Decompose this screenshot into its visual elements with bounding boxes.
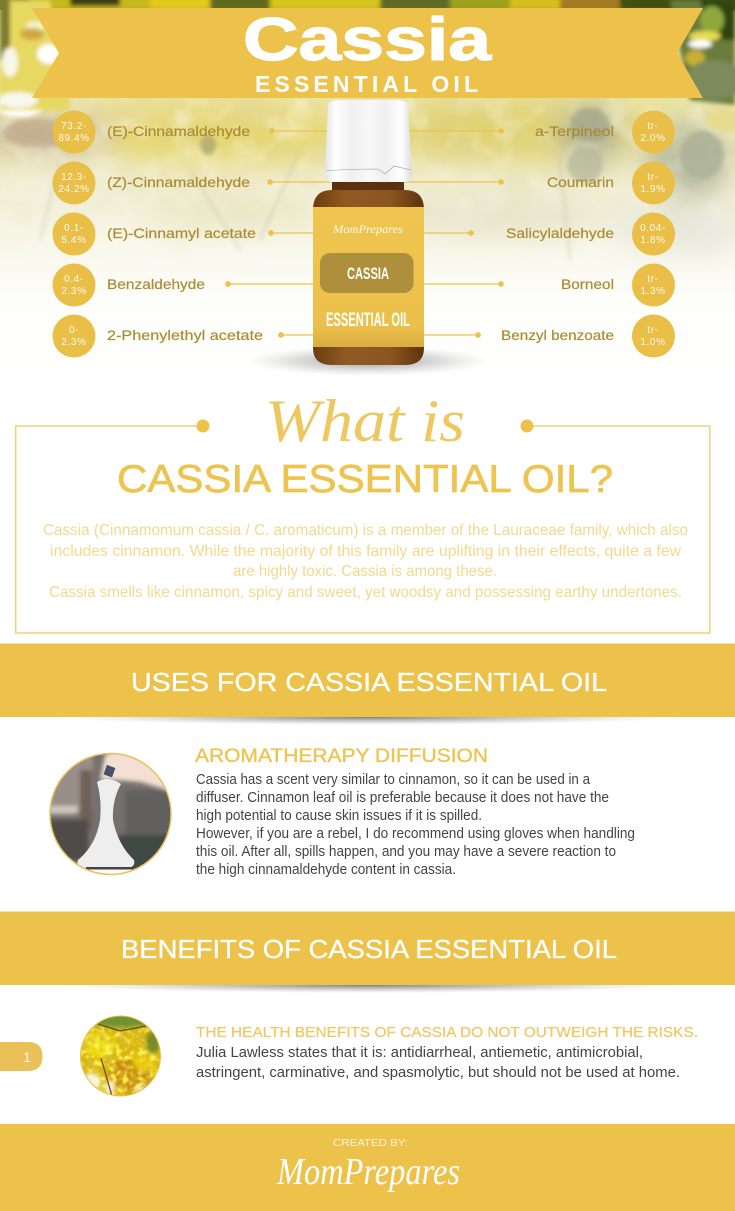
benefits text block <box>196 1044 680 1081</box>
section heading: benefits: BENEFITS OF CASSIA ESSENTIAL OIL <box>121 934 617 964</box>
heading: What is: What is <box>265 388 465 454</box>
bottle shadow <box>246 346 490 376</box>
decorative dot right <box>520 420 534 432</box>
description paragraph: includes cinnamon. While the majority of this family are uplifting in their effects, quite a few <box>50 543 681 560</box>
left compound labels: Benzaldehyde <box>107 276 205 292</box>
description paragraph: are highly toxic. Cassia is among these. <box>233 563 497 580</box>
left compound percentage badges <box>52 110 96 358</box>
heading: Cassia Essential Oil?: CASSIA ESSENTIAL OIL? <box>117 458 613 501</box>
left compound percentage badges: 73.2- <box>61 121 87 132</box>
subheading: health benefits: THE HEALTH BENEFITS OF CASSIA DO NOT OUTWEIGH THE RISKS. <box>196 1024 698 1041</box>
left compound labels <box>107 123 263 343</box>
left compound labels: (E)-Cinnamyl acetate <box>107 225 256 241</box>
benefits text block: Julia Lawless states that it is: antidiarrheal, antiemetic, antimicrobial, <box>196 1044 643 1061</box>
left compound labels: 2-Phenylethyl acetate <box>107 327 263 343</box>
aromatherapy text block: this oil. After all, spills happen, and you may have a severe reaction to <box>196 843 616 860</box>
right compound percentage badges: 1.0% <box>640 337 666 348</box>
left compound percentage badges: 89.4% <box>58 133 90 144</box>
right compound percentage badges: 2.0% <box>640 133 666 144</box>
left compound percentage badges: 2.3% <box>61 286 87 297</box>
right compound percentage badges: tr- <box>647 172 659 183</box>
number 1: 1 <box>23 1049 31 1065</box>
left compound percentage badges: 12.3- <box>61 172 87 183</box>
panel: what is cassia essential oil <box>16 388 710 633</box>
benefits section shadow <box>58 977 678 993</box>
section heading: uses: USES FOR CASSIA ESSENTIAL OIL <box>131 667 607 697</box>
benefits text block: astringent, carminative, and spasmolytic, but should not be used at home. <box>196 1064 680 1081</box>
left compound percentage badges: 0.1- <box>64 223 84 234</box>
number tab <box>0 1042 42 1071</box>
left compound labels: (Z)-Cinnamaldehyde <box>107 174 250 190</box>
uses section shadow <box>58 709 678 725</box>
right compound percentage badges: 1.8% <box>640 235 666 246</box>
right compound labels: Coumarin <box>547 174 614 190</box>
footer logo wordmark: MomPrepares <box>276 1151 460 1193</box>
left compound percentage badges: 0.4- <box>64 274 84 285</box>
essential oil bottle: MomPrepares <box>332 222 403 236</box>
right compound labels: Benzyl benzoate <box>501 327 614 343</box>
left compound percentage badges: 0- <box>69 325 79 336</box>
right compound percentage badges: 0.04- <box>640 223 666 234</box>
aromatherapy text block: high potential to cause skin issues if it is spilled. <box>196 807 482 824</box>
right compound labels: Salicylaldehyde <box>506 225 614 241</box>
section banner: benefits <box>0 912 735 985</box>
description paragraph: Cassia smells like cinnamon, spicy and sweet, yet woodsy and possessing earthy undertones. <box>49 584 682 601</box>
aromatherapy text block: Cassia has a scent very similar to cinnamon, so it can be used in a <box>196 771 591 788</box>
essential oil bottle <box>313 100 424 365</box>
right compound percentage badges: tr- <box>647 274 659 285</box>
title: Cassia: Cassia <box>243 6 492 73</box>
title banner ribbon <box>32 8 703 98</box>
left compound percentage badges: 2.3% <box>61 337 87 348</box>
description paragraph <box>43 522 688 601</box>
decorative dot left <box>196 420 210 432</box>
right compound labels <box>501 123 614 343</box>
photo: cassia flowers <box>78 1014 163 1099</box>
aromatherapy text block: the high cinnamaldehyde content in cassia. <box>196 861 456 878</box>
right compound percentage badges: 1.3% <box>640 286 666 297</box>
leader lines connecting compounds to bottle <box>226 129 503 337</box>
footer band <box>0 1124 735 1211</box>
section banner: uses <box>0 644 735 717</box>
left compound labels: (E)-Cinnamaldehyde <box>107 123 250 139</box>
subheading: aromatherapy diffusion: AROMATHERAPY DIFFUSION <box>195 746 488 767</box>
right compound labels: Borneol <box>561 276 614 292</box>
essential oil bottle: ESSENTIAL OIL <box>326 310 410 331</box>
header photo background: cassia blossoms fading to white <box>0 0 735 288</box>
right compound percentage badges <box>632 110 675 358</box>
aromatherapy text block: diffuser. Cinnamon leaf oil is preferable because it does not have the <box>196 789 609 806</box>
right compound percentage badges: 1.9% <box>640 184 666 195</box>
subtitle: Essential Oil: ESSENTIAL OIL <box>255 71 478 97</box>
left compound percentage badges: 24.2% <box>58 184 90 195</box>
right compound labels: a-Terpineol <box>535 123 614 139</box>
aromatherapy text block <box>196 771 635 878</box>
footer credit label: CREATED BY: <box>333 1137 408 1149</box>
right compound percentage badges: tr- <box>647 325 659 336</box>
photo: diffuser <box>48 748 175 880</box>
aromatherapy text block: However, if you are a rebel, I do recommend using gloves when handling <box>196 825 635 842</box>
essential oil bottle: CASSIA <box>347 264 389 283</box>
description paragraph: Cassia (Cinnamomum cassia / C. aromaticum) is a member of the Lauraceae family, which also <box>43 522 688 539</box>
right compound percentage badges: tr- <box>647 121 659 132</box>
left compound percentage badges: 5.4% <box>61 235 87 246</box>
